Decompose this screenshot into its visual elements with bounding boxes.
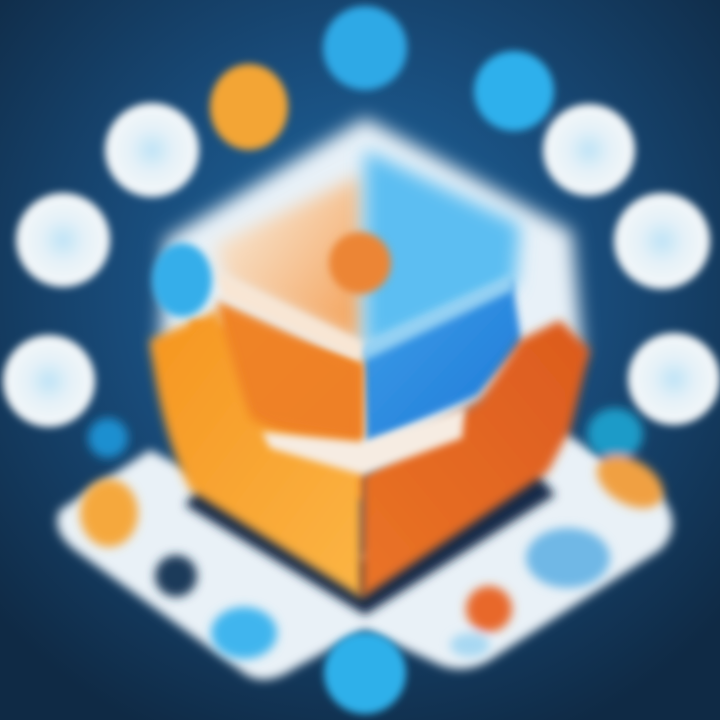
cube top left face [215,175,362,345]
cube lower right face [362,320,590,598]
cube white ledge left [218,272,362,362]
cube top blue highlight [365,150,520,350]
bubble: lower left [3,335,95,427]
bubble: lower right [628,333,720,425]
bubble: right [614,193,710,289]
blue dot bottom centre [324,632,406,714]
icon: dark platform dot [155,555,197,597]
cube light stripe [362,275,514,362]
blue dot top right [474,51,554,131]
bubble: left [16,193,110,287]
icon: small platform patch [450,633,490,657]
icon: top-right platform cluster [587,408,672,519]
cube lower left face [150,310,362,598]
cube blue front face [362,280,522,445]
bubble: upper right [543,104,635,196]
icon: orange-red platform dot [466,586,512,632]
icon: small blue dot left [88,418,128,458]
cube white ledge centre [262,408,465,475]
cube orange filler body [190,320,362,500]
platform icons [80,408,672,659]
icon: orange platform dot [80,479,138,547]
cube upper orange left face [218,300,362,440]
icon: light blue platform patch [526,528,610,588]
cube [150,150,590,598]
hexagon outline backing [160,118,582,470]
cube blue corner blob [152,243,212,317]
bubble: upper left [105,103,199,197]
cube drop shadow [185,465,555,615]
blue dot top centre [323,6,407,90]
cube orange ball [329,232,391,294]
base platform [57,430,672,680]
orange dot top [210,64,288,150]
icon: blue platform dot [211,607,277,659]
